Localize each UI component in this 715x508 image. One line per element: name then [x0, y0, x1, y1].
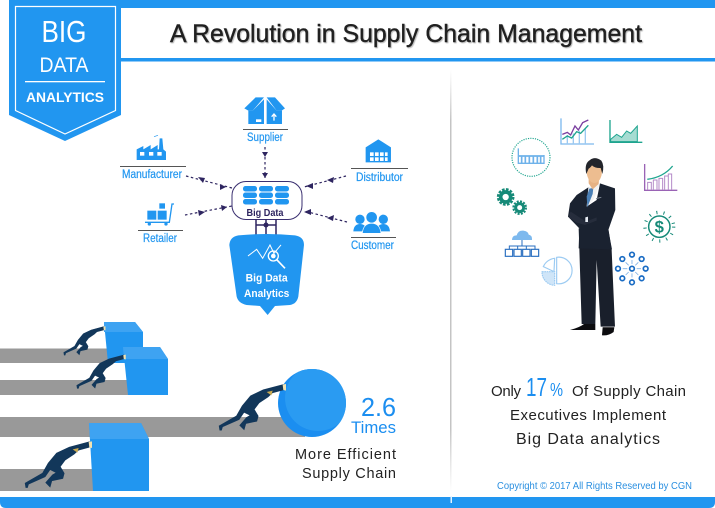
supplier label: Supplier — [247, 132, 283, 144]
stat: 2.6 times — [295, 392, 396, 482]
ball — [278, 369, 346, 437]
copyright: Copyright © 2017 All Rights Reserved by CGN — [497, 480, 692, 492]
icon: cloud network — [505, 231, 539, 256]
big data analytics shield: Big Data — [246, 273, 288, 285]
customer label: Customer — [351, 240, 394, 252]
icon: distributor warehouse — [366, 139, 391, 162]
stat: 2.6 times: Supply Chain — [302, 466, 396, 482]
icon: customer group — [353, 212, 390, 233]
arrows into big data — [185, 147, 347, 222]
badge: big data analytics: ANALYTICS — [26, 89, 104, 105]
supply chain diagram — [120, 97, 408, 315]
text: only 17 percent: Executives Implement — [510, 407, 667, 424]
stat: 2.6 times: More Efficient — [295, 447, 396, 463]
text: only 17 percent: 17 — [526, 372, 547, 402]
text: only 17 percent — [491, 372, 686, 448]
big data database box — [232, 182, 302, 220]
big data database box: Big Data — [246, 207, 284, 219]
text: only 17 percent: % — [550, 380, 563, 400]
icon: gears — [498, 189, 526, 214]
box 2 — [123, 347, 168, 395]
header bar — [9, 0, 715, 62]
arrowheads — [198, 152, 334, 221]
footer bar — [0, 496, 715, 508]
manufacturer label: Manufacturer — [122, 169, 182, 181]
distributor label: Distributor — [356, 172, 403, 184]
text: only 17 percent: Of Supply Chain — [572, 383, 686, 400]
title: A Revolution in Supply Chain Management — [170, 20, 642, 48]
connector — [256, 219, 276, 235]
business analytics illustration — [498, 118, 677, 335]
pushing boxes illustration — [0, 322, 351, 491]
stat: 2.6 times: 2.6 — [361, 392, 396, 422]
businessman figure — [568, 158, 615, 335]
man pushing ball — [219, 384, 286, 430]
icon: dollar — [645, 212, 674, 241]
big data analytics shield: Analytics — [244, 288, 289, 300]
retailer label: Retailer — [143, 233, 177, 245]
divider — [450, 70, 452, 492]
road 3 — [0, 417, 305, 437]
icon: network — [616, 252, 648, 285]
icon: supplier box — [244, 97, 285, 124]
icon: dollar: $ — [655, 218, 665, 237]
road 1 — [0, 348, 110, 363]
box 3 — [89, 423, 149, 491]
icon: pie chart — [542, 257, 572, 285]
icon: area chart — [610, 120, 642, 142]
stat: 2.6 times: Times — [351, 418, 396, 437]
man pushing box 2 — [77, 355, 126, 388]
text: only 17 percent: Only — [491, 383, 522, 400]
text: only 17 percent: Big Data analytics — [516, 431, 660, 448]
box 1 — [104, 322, 143, 363]
icon: line chart — [561, 118, 594, 144]
icon: dotted circle — [512, 138, 550, 176]
man pushing box 1 — [64, 326, 105, 355]
man pushing box 3 — [25, 441, 92, 487]
badge: big data analytics: DATA — [40, 54, 88, 77]
distributor label — [351, 168, 408, 184]
road 4 — [0, 469, 94, 491]
road 2 — [0, 380, 129, 395]
badge: big data analytics: BIG — [42, 14, 86, 49]
icon: retailer cart — [145, 203, 174, 226]
badge: big data analytics — [9, 0, 121, 141]
icon: manufacturer factory — [137, 135, 166, 160]
icon: bar and curve chart — [645, 164, 677, 190]
big data analytics shield — [229, 234, 304, 315]
